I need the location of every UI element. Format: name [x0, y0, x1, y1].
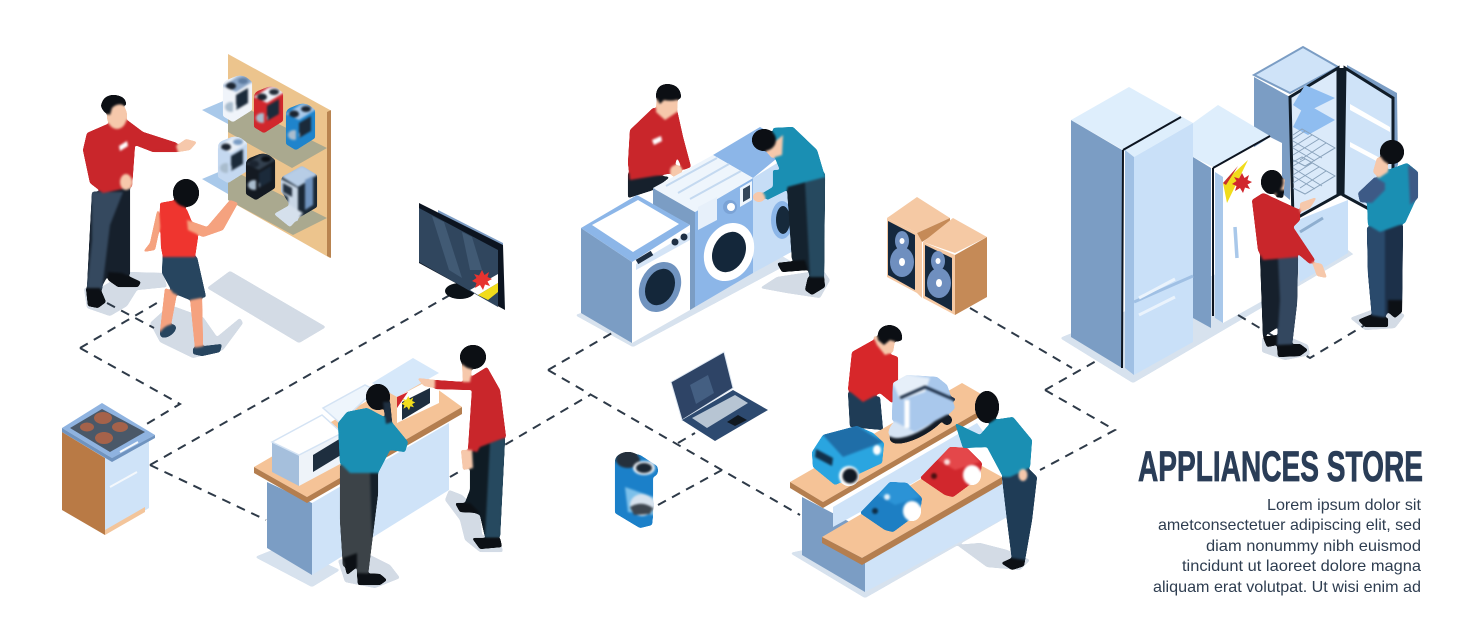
icon: espresso machine [274, 166, 317, 227]
counter base [802, 497, 865, 592]
open fridge [1254, 47, 1398, 282]
lower counter top [822, 455, 1002, 558]
salesman behind washers [628, 84, 691, 198]
description text [1153, 497, 1422, 596]
person: salesman in red [83, 95, 197, 308]
panel: vacuum cleaners counter [790, 325, 1037, 592]
man in blue [1358, 140, 1418, 327]
floor shadows [84, 240, 1405, 598]
microwave left [272, 415, 342, 486]
counter top [254, 373, 462, 497]
icon: kitchen cooker [62, 403, 155, 535]
customer in blue [338, 384, 408, 585]
salesman [848, 325, 902, 430]
tall fridge [1071, 87, 1193, 375]
upper counter top [790, 383, 995, 502]
customer bending over washer [752, 127, 825, 295]
icon: laptop [671, 352, 768, 441]
description text: Lorem ipsum dolor sit [1267, 497, 1422, 514]
icon: red coffee maker [254, 87, 283, 133]
description text: aliquam erat volutpat. Ut wisi enim ad [1153, 579, 1421, 596]
panel: washing machines [581, 84, 825, 343]
blue robot vacuum [812, 426, 884, 486]
icon: black coffee maker [246, 154, 275, 200]
panel: coffee machine wall [202, 54, 331, 258]
icon: blue coffee maker [615, 452, 658, 528]
icon: TV with sale sticker [419, 203, 505, 310]
icon: white coffee maker [223, 76, 252, 122]
wire racks [1293, 129, 1335, 194]
third washer [713, 127, 795, 273]
red vacuum [920, 447, 982, 497]
panel: refrigerators [1071, 47, 1418, 375]
description text: ametconsectetuer adipiscing elit, sed [1158, 517, 1421, 534]
salesman in red [417, 345, 506, 549]
second washer [653, 155, 763, 310]
microwave back [323, 385, 375, 423]
icon: silver coffee maker [218, 137, 247, 183]
icon: blue coffee maker [286, 104, 315, 150]
blue vacuum [860, 482, 922, 532]
description text: diam nonummy nibh euismod [1206, 538, 1421, 555]
silver vacuum [883, 375, 955, 451]
description text: tincidunt ut laoreet dolore magna [1182, 558, 1421, 575]
man in red [1252, 170, 1327, 357]
right open door [1345, 65, 1398, 205]
shelves [228, 99, 327, 168]
panel: microwaves counter [254, 345, 506, 585]
middle fridge with sticker [1193, 105, 1282, 328]
person: woman customer [143, 179, 238, 356]
dashed connector network [80, 295, 1365, 520]
first washer [581, 195, 690, 343]
counter base [267, 482, 312, 575]
woman customer [955, 391, 1037, 570]
icon: speakers [887, 197, 987, 315]
shelf board [228, 54, 330, 258]
microwave right with sticker [372, 358, 439, 423]
left open door interior [1290, 68, 1338, 220]
